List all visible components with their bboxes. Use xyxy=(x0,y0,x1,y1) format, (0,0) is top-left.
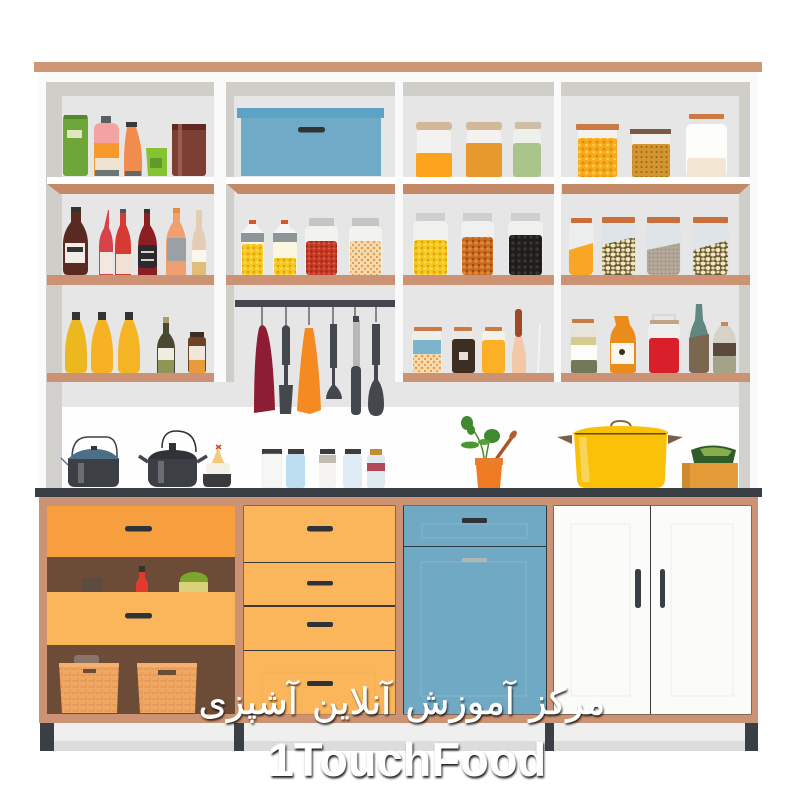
base cabinet body xyxy=(39,497,758,723)
drawer: middle orange xyxy=(47,592,235,645)
panel: shelf column 3 xyxy=(403,82,554,382)
small spice jars row xyxy=(262,449,385,488)
items: middle row fourth column, glass jars xyxy=(569,217,729,275)
basket: left xyxy=(59,655,119,713)
blue door xyxy=(404,547,546,714)
utensil: red towel xyxy=(254,325,275,413)
icon: yellow casserole pot xyxy=(557,421,683,488)
panel: shelf column 1 xyxy=(46,82,214,382)
title: Persian heading: مرکز آموزش آنلاین آشپزی xyxy=(199,682,605,723)
hanging rail with utensils xyxy=(235,300,395,416)
right door xyxy=(651,506,751,714)
items: bottom row fourth column xyxy=(570,304,736,373)
shelving unit frame xyxy=(38,72,758,488)
title: brand name: 1TouchFood xyxy=(268,733,546,786)
items: middle row centre, spice jars xyxy=(241,218,382,275)
open shelf items xyxy=(82,566,208,592)
drawer 3 xyxy=(244,607,395,650)
icon: potted herb with spoon xyxy=(461,416,518,488)
panel: white double-door cabinet xyxy=(554,506,752,714)
items: top row fourth column, glass jars xyxy=(576,114,727,177)
items: bottom row left, oil bottles xyxy=(65,312,206,373)
icon: blue lid kettle xyxy=(61,437,119,487)
panel: blue cabinet xyxy=(403,506,547,714)
utensil: knife xyxy=(351,316,361,415)
drawer: top orange xyxy=(47,506,235,557)
countertop xyxy=(35,488,762,497)
panel: drawer stack xyxy=(244,506,396,714)
panel: shelf column 2 xyxy=(226,82,395,382)
items: middle row left, sauce bottles xyxy=(63,207,206,275)
items: top row left, packaged goods xyxy=(63,115,206,176)
utensil: ladle xyxy=(326,324,342,399)
panel: left cabinet with open shelves xyxy=(47,506,235,714)
items: middle row third column, glass jars xyxy=(413,213,543,275)
items: top row third column, glass jars xyxy=(416,122,541,177)
drawer 2 xyxy=(244,563,395,605)
utensil: slotted turner xyxy=(279,325,293,414)
icon: small cruet in bowl xyxy=(203,445,231,487)
drawer 1 xyxy=(244,506,395,562)
storage box xyxy=(237,108,384,176)
icon: box with greens xyxy=(682,446,738,488)
basket: right xyxy=(137,663,197,713)
drawer 4 xyxy=(244,651,395,714)
top board xyxy=(34,62,762,72)
floor strip and legs xyxy=(40,723,758,751)
left door xyxy=(554,506,650,714)
icon: black pot with arched handle xyxy=(139,431,207,487)
blue drawer xyxy=(404,506,546,546)
panel: shelf column 4 xyxy=(561,82,750,382)
utensil: spoon xyxy=(368,324,384,416)
items: bottom row third column xyxy=(412,309,540,373)
utensil: orange towel xyxy=(297,328,321,414)
